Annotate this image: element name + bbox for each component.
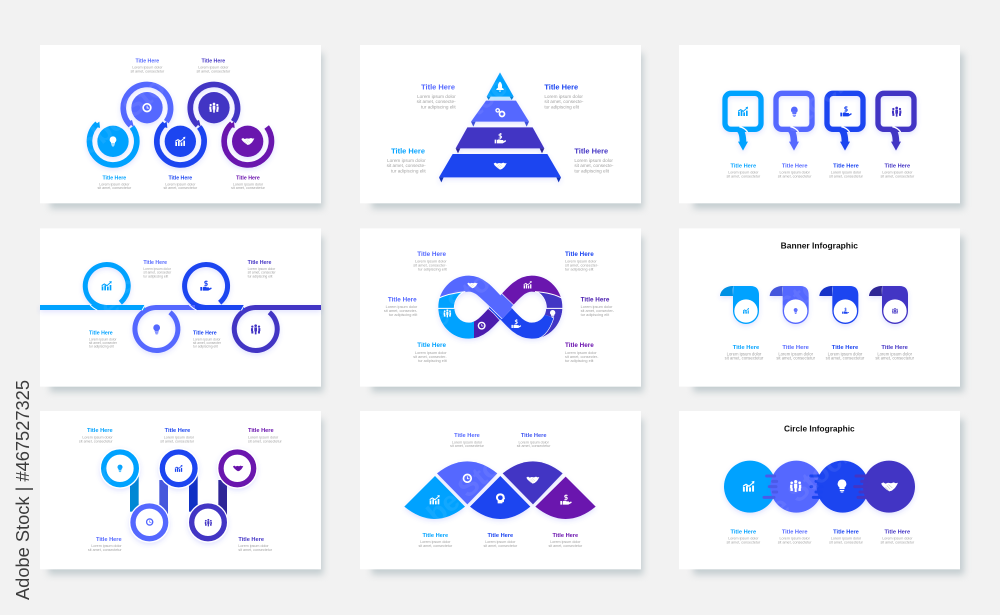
- segment labels: sit amet, consectetur: [483, 544, 518, 548]
- node labels: Lorem ipsum dolor: [82, 435, 113, 439]
- pyramid labels: Lorem ipsum dolor: [417, 94, 456, 99]
- ring labels: Lorem ipsum dolor: [165, 182, 196, 186]
- loop labels: Title Here: [89, 330, 113, 336]
- pin 3: [827, 93, 863, 151]
- infinity labels: Lorem ipsum dolor: [415, 351, 447, 355]
- node labels: Lorem ipsum dolor: [248, 435, 279, 439]
- pyramid labels: tur adipiscing elit: [544, 104, 580, 109]
- circle 4: [863, 461, 915, 513]
- circle 1: [724, 461, 776, 513]
- banner labels: Title Here: [733, 345, 760, 351]
- watermark: Adobe Stock: [699, 251, 850, 385]
- infinity labels: [384, 251, 615, 363]
- node icons: [117, 465, 243, 526]
- loop labels: sit amet, consecter: [89, 341, 118, 345]
- banner 4: [869, 286, 908, 324]
- ring labels: Title Here: [201, 59, 225, 65]
- circle labels: Title Here: [730, 530, 756, 536]
- circle labels: Title Here: [884, 530, 910, 536]
- panel: serpentine timeline: [40, 411, 323, 575]
- ring labels: Title Here: [236, 175, 260, 181]
- banner 2: [770, 286, 809, 324]
- pyramid labels: sit amet, consecte-: [417, 99, 456, 104]
- infinity labels: Title Here: [417, 251, 446, 258]
- banner labels: Lorem ipsum dolor: [727, 351, 762, 356]
- infinity labels: Title Here: [565, 251, 594, 258]
- node labels: sit amet, consectetur: [238, 548, 273, 552]
- banner labels: Title Here: [881, 345, 909, 351]
- pin labels: sit amet, consectetur: [726, 175, 761, 179]
- pyramid labels: sit amet, consecte-: [544, 99, 584, 104]
- infinity labels: Title Here: [581, 296, 610, 303]
- panel: wave segments: [360, 411, 643, 575]
- ring labels: Lorem ipsum dolor: [233, 182, 264, 186]
- segment labels: Lorem ipsum dolor: [519, 440, 550, 444]
- node labels: Lorem ipsum dolor: [238, 544, 269, 548]
- infinity labels: Lorem ipsum dolor: [565, 351, 597, 355]
- pyramid labels: Lorem ipsum dolor: [387, 158, 426, 163]
- circle 2: [770, 461, 822, 513]
- watermark: Adobe Stock: [374, 61, 525, 195]
- panel: banners: [679, 228, 964, 392]
- circle labels: Lorem ipsum dolor: [882, 537, 913, 541]
- node labels: sit amet, consectetur: [248, 439, 283, 443]
- watermark: Adobe Stock: [39, 236, 190, 370]
- circle labels: Title Here: [782, 530, 808, 536]
- pyramid labels: Title Here: [544, 82, 578, 91]
- circle connector dashes: [764, 476, 867, 497]
- segment labels: sit amet, consectetur: [450, 444, 485, 448]
- infinity labels: sit amet, consecter-: [581, 309, 615, 313]
- connectors: [130, 468, 227, 522]
- loop 3 blue: [185, 265, 244, 307]
- node 3: [217, 448, 258, 489]
- infinity labels: Title Here: [565, 342, 594, 349]
- banner labels: Lorem ipsum dolor: [778, 351, 814, 356]
- node labels: [79, 428, 283, 552]
- node labels: sit amet, consectetur: [88, 548, 122, 552]
- infinity labels: sit amet, consecter-: [565, 355, 599, 359]
- ring labels: sit amet, consectetur: [97, 186, 132, 190]
- segment labels: Title Here: [487, 533, 513, 539]
- loop labels: Lorem ipsum dolor: [193, 337, 221, 341]
- infinity labels: sit amet, consecter-: [565, 264, 599, 268]
- circle 3: [817, 461, 869, 513]
- ring 1 cyan: [89, 122, 137, 165]
- circle labels: sit amet, consectetur: [778, 541, 812, 545]
- ring 2 periwinkle: [123, 84, 171, 127]
- ring 3 blue: [157, 122, 204, 165]
- pin icons and white cuts: [738, 106, 901, 132]
- infinity labels: tur adipiscing elit: [565, 268, 594, 272]
- segment labels: Lorem ipsum dolor: [550, 540, 581, 544]
- ring labels: sit amet, consectetur: [163, 186, 198, 190]
- loop labels: sit amet, consecter: [193, 341, 222, 345]
- segment labels: sit amet, consectetur: [548, 544, 583, 548]
- pyramid labels: sit amet, consecte-: [387, 163, 426, 168]
- node labels: Title Here: [248, 428, 274, 434]
- ring labels: Lorem ipsum dolor: [198, 66, 229, 70]
- loop joints and icons: [90, 280, 260, 334]
- pin labels: Lorem ipsum dolor: [780, 171, 811, 175]
- infinity labels: Lorem ipsum dolor: [581, 305, 613, 309]
- banner labels: Title Here: [782, 345, 810, 351]
- ring labels: Lorem ipsum dolor: [132, 66, 163, 70]
- node labels: Title Here: [87, 428, 113, 434]
- pyramid labels: Title Here: [421, 82, 455, 91]
- banner labels: Title Here: [832, 345, 859, 351]
- loop labels: tur adipiscing elit: [193, 345, 218, 349]
- circle labels: Lorem ipsum dolor: [780, 537, 811, 541]
- ring labels: Title Here: [168, 175, 192, 181]
- node labels: Title Here: [96, 537, 122, 543]
- watermark: [39, 51, 860, 570]
- pyramid labels: sit amet, consecte-: [574, 163, 614, 168]
- loop labels: sit amet, consecter: [143, 271, 172, 275]
- ring labels: [97, 59, 266, 190]
- pin labels: Title Here: [782, 164, 808, 170]
- node labels: Lorem ipsum dolor: [164, 435, 195, 439]
- pin labels: Title Here: [833, 164, 859, 170]
- pin labels: Title Here: [730, 164, 756, 170]
- ring labels: Title Here: [135, 59, 159, 65]
- circle labels: Lorem ipsum dolor: [831, 537, 862, 541]
- banner labels: sit amet, consectetur: [826, 356, 865, 361]
- segment 5: [535, 477, 596, 519]
- infinity labels: tur adipiscing elit: [581, 313, 610, 317]
- banner heading: Banner Infographic: [781, 242, 859, 251]
- watermark: Adobe Stock: [44, 51, 195, 185]
- ring labels: Title Here: [102, 175, 126, 181]
- banner labels: Lorem ipsum dolor: [877, 351, 913, 356]
- watermark: Adobe Stock: [704, 66, 855, 200]
- panel: looped line: [40, 228, 323, 392]
- segment labels: Title Here: [552, 533, 578, 539]
- circle labels: sit amet, consectetur: [829, 541, 864, 545]
- ring labels: sit amet, consectetur: [231, 186, 266, 190]
- segment labels: Lorem ipsum dolor: [452, 440, 483, 444]
- pin 1: [725, 93, 761, 151]
- pin labels: Lorem ipsum dolor: [728, 171, 759, 175]
- banner 3: [819, 286, 858, 324]
- node 2: [158, 448, 199, 489]
- pin labels: Title Here: [884, 164, 910, 170]
- loop labels: Lorem ipsum dolor: [143, 267, 172, 271]
- banner labels: Lorem ipsum dolor: [828, 351, 863, 356]
- circle labels: sit amet, consectetur: [726, 541, 761, 545]
- pin labels: sit amet, consectetur: [778, 175, 812, 179]
- infinity bands: [435, 284, 565, 331]
- banner labels: sit amet, consectetur: [725, 356, 764, 361]
- pin 4: [878, 93, 914, 151]
- ring 5 purple: [224, 122, 271, 165]
- segment labels: Title Here: [422, 533, 448, 539]
- loop labels: sit amet, consecter: [248, 271, 276, 275]
- panel: infinity: [360, 228, 643, 392]
- circle labels: Lorem ipsum dolor: [728, 537, 759, 541]
- node labels: Lorem ipsum dolor: [91, 544, 122, 548]
- segment labels: [418, 433, 583, 548]
- node labels: Title Here: [165, 428, 190, 434]
- circle icons: [743, 479, 898, 492]
- pyramid labels: Title Here: [391, 146, 425, 155]
- ring labels: Lorem ipsum dolor: [99, 182, 130, 186]
- segment labels: sit amet, consectetur: [418, 544, 453, 548]
- ring labels: sit amet, consectetur: [130, 69, 165, 73]
- watermark: Adobe Stock: [49, 391, 200, 525]
- watermark: Adobe Stock: [709, 436, 860, 570]
- loop labels: Lorem ipsum dolor: [89, 337, 117, 341]
- node 1: [100, 448, 140, 489]
- pyramid labels: tur adipiscing elit: [391, 168, 426, 173]
- pyramid labels: tur adipiscing elit: [421, 104, 456, 109]
- banner labels: [725, 345, 915, 361]
- node labels: sit amet, consectetur: [160, 439, 195, 443]
- pyramid labels: Lorem ipsum dolor: [544, 94, 583, 99]
- panel: circular arrows: [40, 45, 323, 209]
- ring 4 indigo: [190, 84, 238, 127]
- segment labels: Title Here: [521, 433, 547, 439]
- segment 1: [404, 476, 465, 519]
- segment labels: sit amet, consectetur: [517, 444, 551, 448]
- loop labels: tur adipiscing elit: [143, 274, 168, 278]
- segment icons: [430, 474, 572, 505]
- banner labels: sit amet, consectetur: [875, 356, 915, 361]
- loop 4 indigo: [234, 307, 321, 350]
- circle labels: sit amet, consectetur: [880, 541, 915, 545]
- pyramid labels: Lorem ipsum dolor: [574, 158, 613, 163]
- infinity icons: [444, 281, 555, 330]
- circle labels: Title Here: [833, 530, 859, 536]
- circle heading: Circle Infographic: [784, 425, 855, 434]
- infinity labels: tur adipiscing elit: [565, 359, 594, 363]
- panel: overlapping circles: [679, 411, 964, 575]
- pin 2: [776, 93, 812, 151]
- stock side label: Adobe Stock | #467527325: [13, 380, 33, 600]
- pyramid labels: [387, 82, 614, 173]
- node labels: sit amet, consectetur: [79, 439, 113, 443]
- pin labels: Lorem ipsum dolor: [831, 171, 862, 175]
- infinity labels: Lorem ipsum dolor: [565, 260, 597, 264]
- infinity labels: Title Here: [417, 342, 446, 349]
- loop labels: Title Here: [143, 260, 167, 266]
- segment labels: Lorem ipsum dolor: [420, 540, 451, 544]
- pin labels: sit amet, consectetur: [829, 175, 864, 179]
- panel: square pins: [679, 45, 964, 209]
- watermark: Adobe Stock: [369, 246, 520, 380]
- pyramid tiers: [439, 72, 561, 182]
- infinity labels: tur adipiscing elit: [389, 313, 418, 317]
- loop labels: Title Here: [248, 260, 271, 266]
- infinity labels: Lorem ipsum dolor: [386, 305, 418, 309]
- loop labels: [89, 260, 276, 349]
- circle labels: [726, 530, 915, 545]
- node labels: Title Here: [238, 537, 264, 543]
- infinity labels: tur adipiscing elit: [418, 359, 448, 363]
- loop labels: tur adipiscing elit: [89, 345, 114, 349]
- infinity labels: Title Here: [388, 296, 417, 303]
- pyramid labels: tur adipiscing elit: [574, 168, 610, 173]
- segment 3: [470, 476, 530, 519]
- infinity labels: tur adipiscing elit: [418, 268, 448, 272]
- loop labels: Title Here: [193, 330, 217, 336]
- pin labels: sit amet, consectetur: [880, 175, 915, 179]
- watermark: Adobe Stock: [379, 431, 530, 565]
- segment labels: Lorem ipsum dolor: [485, 540, 516, 544]
- pin labels: Lorem ipsum dolor: [882, 171, 913, 175]
- infinity labels: sit amet, consecter-: [384, 309, 418, 313]
- pyramid labels: Title Here: [574, 146, 608, 155]
- panel: pyramid: [360, 45, 643, 209]
- segment 2: [437, 461, 497, 504]
- infinity labels: Lorem ipsum dolor: [415, 260, 447, 264]
- loop labels: tur adipiscing elit: [248, 274, 273, 278]
- segment 4: [503, 461, 563, 504]
- pin labels: [726, 164, 915, 179]
- ring labels: sit amet, consectetur: [196, 69, 231, 73]
- node 4: [129, 502, 170, 543]
- segment labels: Title Here: [454, 433, 480, 439]
- banner labels: sit amet, consectetur: [776, 356, 816, 361]
- loop labels: Lorem ipsum dolor: [248, 267, 276, 271]
- pyramid icons: [494, 82, 507, 170]
- infinity labels: sit amet, consecter-: [413, 355, 447, 359]
- banner 1: [720, 286, 759, 324]
- loop 1 cyan: [40, 265, 145, 307]
- infinity labels: sit amet, consecter-: [413, 264, 447, 268]
- ring icons: [110, 103, 254, 146]
- loop 2 periwinkle: [135, 307, 195, 350]
- node 5: [188, 502, 228, 543]
